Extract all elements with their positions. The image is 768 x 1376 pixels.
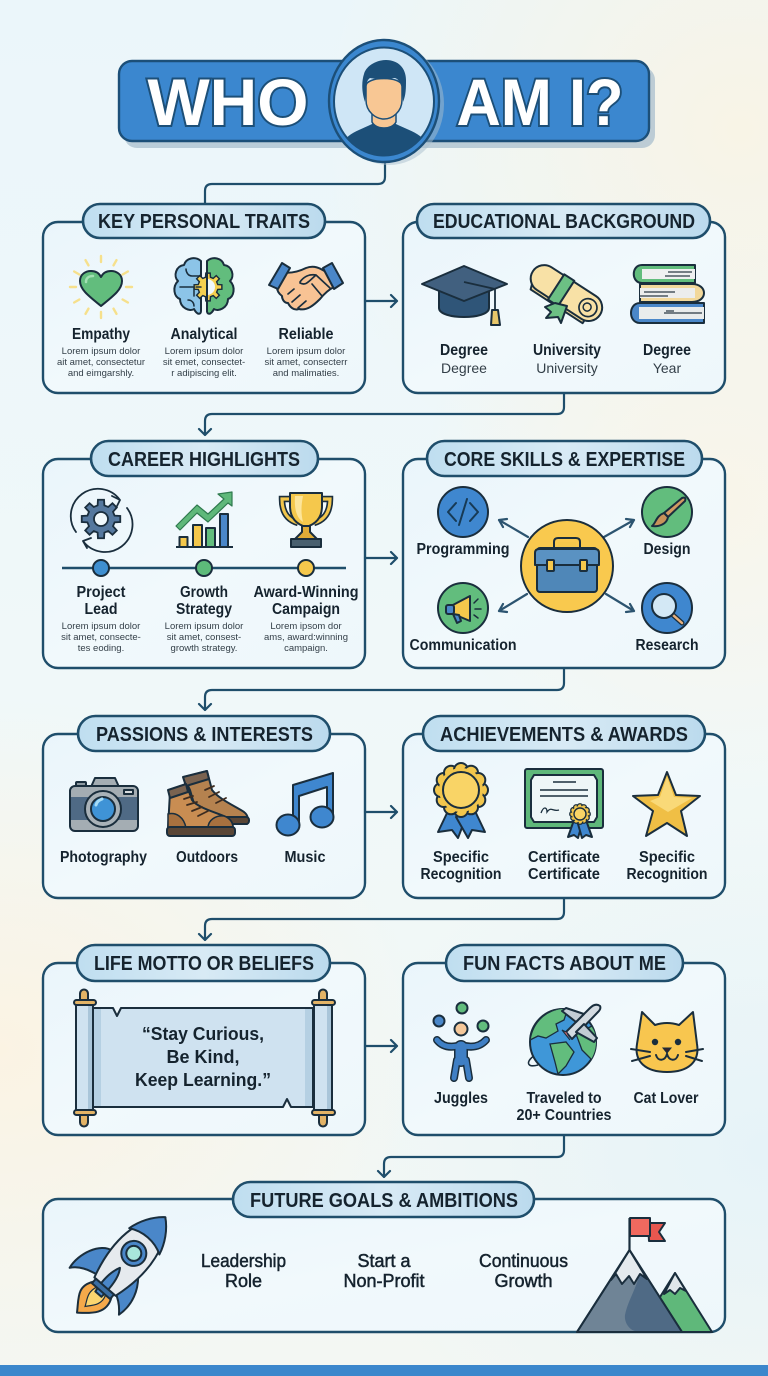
- heading: achievements and awards: [423, 716, 705, 751]
- portrait medallion: [329, 40, 444, 165]
- icon: graduation cap: [422, 266, 507, 325]
- heading: educational background: EDUCATIONAL BACKGROUND: [433, 211, 695, 233]
- heading: core skills and expertise: [427, 441, 702, 476]
- text: reliable description: [265, 346, 347, 379]
- connector: awards to motto: [199, 898, 564, 940]
- heading: key personal traits: [83, 204, 325, 238]
- label: analytical: Analytical: [170, 326, 238, 343]
- icon: brain with gear: [174, 258, 234, 314]
- icon: globe and plane: [529, 1005, 600, 1075]
- skill arrows: [499, 519, 634, 612]
- text: leadership role: Leadership: [201, 1251, 286, 1271]
- text: reliable description: and malimaties.: [273, 368, 339, 379]
- text: leadership role: Role: [225, 1271, 262, 1291]
- text: project lead description: sit amet, consecte-: [61, 632, 141, 643]
- icon: juggler: [434, 1002, 488, 1078]
- label: growth strategy: [176, 584, 232, 618]
- icon: camera: [70, 778, 138, 831]
- label: specific recognition two: Specific: [639, 849, 695, 866]
- text: degree detail: Degree: [441, 360, 487, 376]
- text: analytical description: sit emet, consectet-: [163, 357, 245, 368]
- icon: cat face: [631, 1012, 703, 1072]
- label: award-winning campaign: Award-Winning: [254, 584, 358, 601]
- label: research: Research: [636, 637, 698, 654]
- label: specific recognition one: Specific: [433, 849, 489, 866]
- title banner: [119, 40, 655, 165]
- scroll with motto: [74, 990, 335, 1126]
- label: growth strategy: Strategy: [176, 601, 232, 618]
- panel: educational background: [403, 204, 725, 393]
- text: analytical description: r adipiscing elit.: [171, 368, 237, 379]
- text: leadership role: [201, 1251, 286, 1291]
- panel: core skills and expertise: [403, 441, 725, 668]
- label: traveled to 20+ countries: Traveled to: [526, 1090, 602, 1107]
- text: reliable description: Lorem ipsum dolor: [267, 346, 345, 357]
- text: analytical description: [163, 346, 245, 379]
- panel: life motto or beliefs: [43, 945, 365, 1135]
- motto text: [135, 1024, 271, 1090]
- text: campaign description: [264, 621, 348, 654]
- title word: WHO: WHO: [148, 65, 308, 139]
- label: traveled to 20+ countries: [516, 1090, 612, 1124]
- label: degree: Degree: [440, 342, 488, 359]
- text: campaign description: campaign.: [284, 643, 328, 654]
- label: empathy: Empathy: [72, 326, 130, 343]
- footer bar: [0, 1365, 768, 1376]
- label: design: Design: [644, 541, 690, 558]
- icon: research magnifier: [642, 583, 692, 633]
- text: continuous growth: Growth: [494, 1271, 553, 1291]
- label: specific recognition one: [420, 849, 502, 883]
- text: continuous growth: Continuous: [479, 1251, 568, 1271]
- text: growth strategy description: [165, 621, 243, 654]
- connector: skills to passions: [199, 668, 564, 710]
- connector: fun facts to future goals: [378, 1135, 564, 1177]
- icon: toolbox hub: [521, 520, 613, 612]
- label: reliable: Reliable: [278, 326, 334, 343]
- icon: handshake: [269, 263, 343, 310]
- label: growth strategy: Growth: [180, 584, 228, 601]
- text: continuous growth: [479, 1251, 568, 1291]
- label: certificate: [528, 849, 600, 883]
- text: analytical description: Lorem ipsum dolor: [165, 346, 243, 357]
- icon: communication megaphone: [438, 583, 488, 633]
- icon: growth bar chart: [176, 492, 233, 547]
- heading: fun facts about me: [446, 945, 683, 981]
- label: outdoors: Outdoors: [176, 849, 238, 866]
- label: photography: Photography: [60, 849, 147, 866]
- connector: title to traits: [205, 160, 385, 205]
- label: project lead: Project: [76, 584, 126, 601]
- label: project lead: [76, 584, 126, 618]
- label: project lead: Lead: [84, 601, 118, 618]
- icon: rocket: [50, 1191, 188, 1335]
- title word: AM I?: AM I?: [456, 65, 624, 139]
- label: specific recognition two: [626, 849, 708, 883]
- label: cat lover: Cat Lover: [634, 1090, 698, 1107]
- heading: life motto or beliefs: [77, 945, 330, 981]
- arrow: traits to education: [365, 295, 397, 307]
- panel: achievements and awards: [403, 716, 725, 898]
- icon: stack of books: [631, 265, 704, 323]
- text: empathy description: ait amet, consectetur: [57, 357, 145, 368]
- text: growth strategy description: Lorem ipsum dolor: [165, 621, 243, 632]
- heading: future goals and ambitions: [233, 1182, 534, 1217]
- icon: hiking boots: [167, 771, 249, 836]
- label: specific recognition one: Recognition: [420, 866, 502, 883]
- motto text: Be Kind,: [166, 1047, 240, 1067]
- icon: heart with rays: [70, 256, 132, 318]
- arrow: career to skills: [365, 552, 397, 564]
- panel: passions and interests: [43, 716, 365, 898]
- text: growth strategy description: sit amet, consest-: [167, 632, 241, 643]
- label: degree year heading: Degree: [643, 342, 691, 359]
- label: traveled to 20+ countries: 20+ Countries: [516, 1107, 612, 1124]
- text: project lead description: [61, 621, 141, 654]
- label: music: Music: [284, 849, 326, 866]
- label: communication: Communication: [410, 637, 516, 654]
- motto text: Keep Learning.”: [135, 1070, 271, 1090]
- text: empathy description: [57, 346, 145, 379]
- icon: mountains with flag: [577, 1218, 712, 1332]
- icon: diploma scroll: [524, 259, 608, 329]
- heading: career highlights: [91, 441, 318, 476]
- heading: core skills and expertise: CORE SKILLS & EXPERTISE: [444, 449, 685, 471]
- arrow: motto to fun facts: [365, 1040, 397, 1052]
- icon: programming code: [438, 487, 488, 537]
- label: award-winning campaign: Campaign: [272, 601, 340, 618]
- text: empathy description: Lorem ipsum dolor: [62, 346, 140, 357]
- label: certificate: Certificate: [528, 849, 600, 866]
- panel: fun facts about me: [403, 945, 725, 1135]
- text: year: Year: [653, 360, 681, 376]
- arrow: passions to achievements: [365, 806, 397, 818]
- icon: gear with cycle arrows: [71, 489, 132, 552]
- label: specific recognition two: Recognition: [626, 866, 708, 883]
- panel: career highlights: [43, 441, 365, 668]
- icon: certificate: [525, 769, 603, 838]
- label: award-winning campaign: [254, 584, 358, 618]
- text: project lead description: Lorem ipsum dolor: [62, 621, 140, 632]
- icon: gold star: [633, 772, 700, 836]
- text: empathy description: and eimgarshly.: [68, 368, 134, 379]
- icon: music note: [276, 773, 334, 836]
- text: start a non-profit: Non-Profit: [344, 1271, 424, 1291]
- heading: educational background: [417, 204, 710, 238]
- text: campaign description: Lorem ipsom dor: [270, 621, 342, 632]
- icon: rosette medal: [434, 763, 488, 838]
- label: programming: Programming: [416, 541, 510, 558]
- panel: key personal traits: [43, 204, 365, 393]
- heading: career highlights: CAREER HIGHLIGHTS: [108, 449, 300, 471]
- text: start a non-profit: [344, 1251, 424, 1291]
- heading: passions and interests: PASSIONS & INTERESTS: [96, 724, 313, 746]
- heading: achievements and awards: ACHIEVEMENTS & AWARDS: [440, 724, 688, 746]
- label: certificate: Certificate: [528, 866, 600, 883]
- text: project lead description: tes eoding.: [78, 643, 124, 654]
- heading: life motto or beliefs: LIFE MOTTO OR BELIEFS: [94, 953, 314, 975]
- icon: design paintbrush: [642, 487, 692, 537]
- heading: fun facts about me: FUN FACTS ABOUT ME: [463, 953, 666, 975]
- text: university detail: University: [536, 360, 598, 376]
- label: juggles: Juggles: [434, 1090, 488, 1107]
- connector: education to career: [199, 393, 564, 435]
- timeline: [62, 560, 346, 576]
- text: campaign description: ams, award:winning: [264, 632, 348, 643]
- heading: future goals and ambitions: FUTURE GOALS & AMBITIONS: [250, 1190, 518, 1212]
- panel: future goals and ambitions: [43, 1182, 725, 1335]
- label: university: University: [533, 342, 601, 359]
- icon: trophy: [282, 493, 330, 547]
- motto text: “Stay Curious,: [142, 1024, 264, 1044]
- text: growth strategy description: growth strategy.: [171, 643, 237, 654]
- heading: passions and interests: [78, 716, 330, 751]
- heading: key personal traits: KEY PERSONAL TRAITS: [98, 211, 310, 233]
- text: start a non-profit: Start a: [357, 1251, 411, 1271]
- text: reliable description: sit amet, consecterr: [265, 357, 347, 368]
